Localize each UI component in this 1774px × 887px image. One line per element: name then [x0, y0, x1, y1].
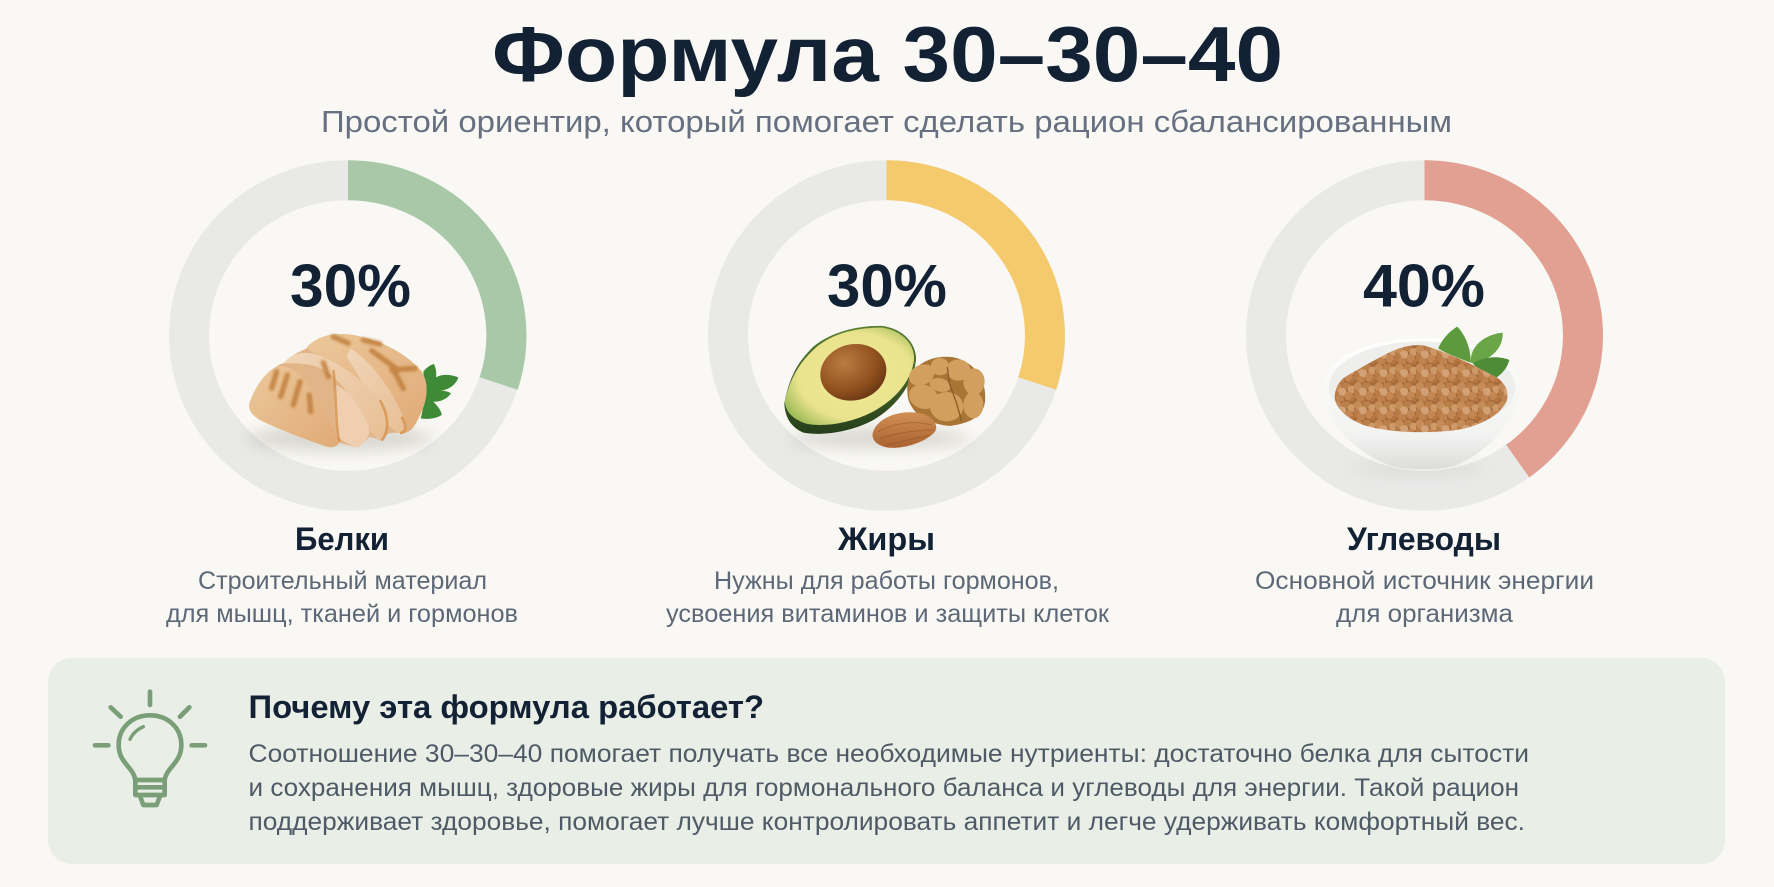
title: Формула 30–30–40 [492, 10, 1283, 98]
callout body text: поддерживает здоровье, помогает лучше контролировать аппетит и легче удерживать комфортный вес. [248, 808, 1525, 836]
icon: bowl of buckwheat [1324, 327, 1520, 473]
donut chart: 30% fats [728, 180, 1045, 491]
panel: fats [666, 180, 1110, 628]
label: proteins: Белки [295, 521, 389, 557]
label: fats: Жиры [837, 521, 935, 557]
callout: why the formula works [48, 658, 1725, 864]
description: fats [666, 567, 1110, 628]
icon: grilled chicken [247, 334, 458, 451]
percentage: 30%: 30% [290, 252, 411, 320]
percentage: 40%: 40% [1363, 252, 1485, 320]
callout background [48, 658, 1725, 864]
description: fats: усвоения витаминов и защиты клеток [666, 600, 1110, 628]
callout body text: и сохранения мышц, здоровые жиры для гормонального баланса и углеводы для энергии. Такой рацион [248, 774, 1519, 802]
description: fats: Нужны для работы гормонов, [714, 567, 1059, 595]
description: proteins [166, 567, 518, 628]
callout body text: Соотношение 30–30–40 помогает получать все необходимые нутриенты: достаточно белка для сытости [248, 740, 1529, 768]
panel: carbohydrates [1255, 180, 1594, 628]
callout heading: Почему эта формула работает? [248, 689, 764, 725]
description: proteins: для мышц, тканей и гормонов [166, 600, 518, 628]
icon: avocado and nuts [784, 326, 985, 448]
description: carbohydrates [1255, 567, 1594, 628]
description: carbohydrates: для организма [1336, 600, 1513, 628]
icon: light bulb [95, 692, 205, 805]
callout body text [248, 740, 1529, 836]
panel: proteins [166, 180, 518, 628]
subtitle: Простой ориентир, который помогает сделать рацион сбалансированным [321, 104, 1452, 139]
label: carbohydrates: Углеводы [1347, 521, 1501, 557]
description: proteins: Строительный материал [198, 567, 487, 595]
description: carbohydrates: Основной источник энергии [1255, 567, 1594, 595]
donut chart: 40% carbohydrates [1266, 180, 1583, 491]
donut chart: 30% proteins [189, 180, 506, 491]
percentage: 30%: 30% [827, 252, 947, 320]
